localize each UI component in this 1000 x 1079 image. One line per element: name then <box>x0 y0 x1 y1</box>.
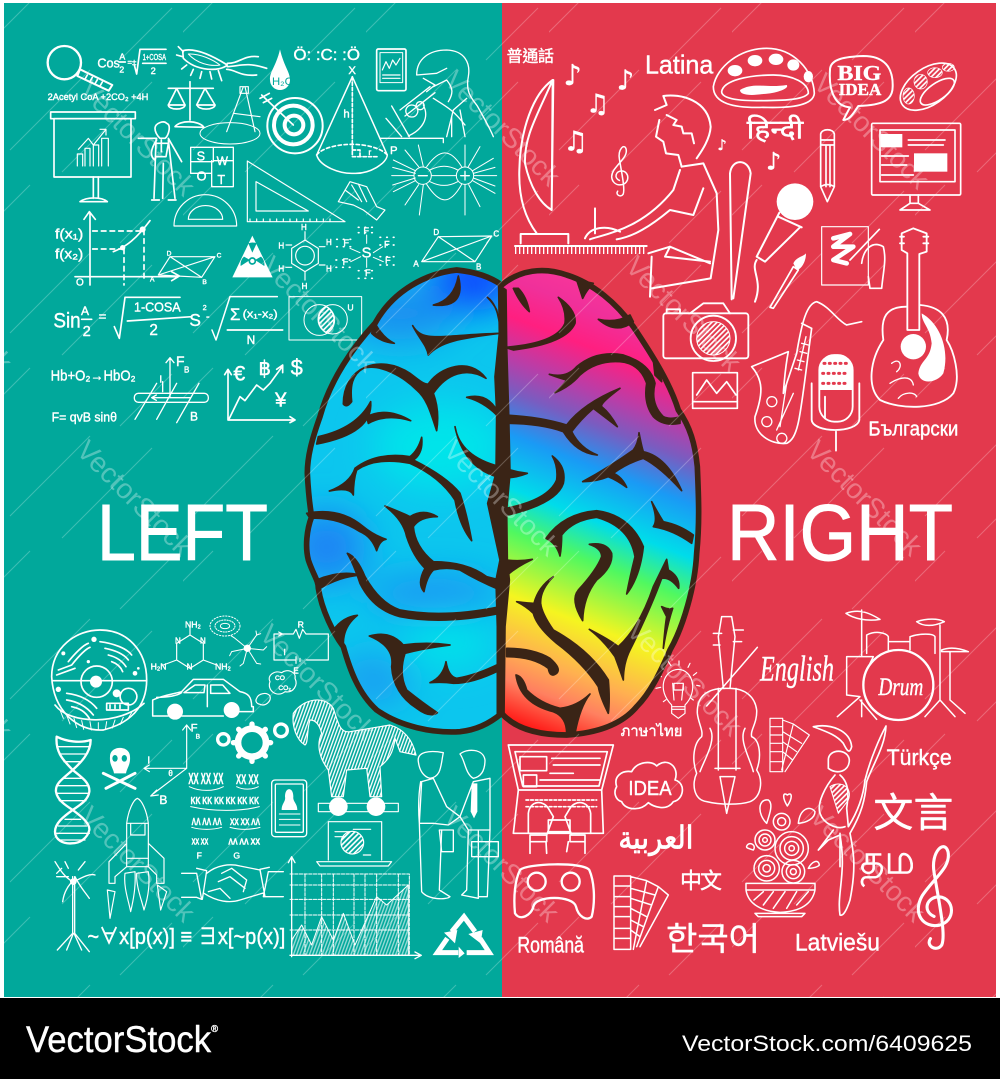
icon: pencil <box>821 130 834 202</box>
formula: half angle cosine: Cos <box>97 56 120 70</box>
diagram: sulfur hexafluoride: F <box>385 255 391 265</box>
text: Thai: ภาษาไทย <box>621 722 682 740</box>
icon: man presenting <box>138 122 182 200</box>
brain: right hemisphere colour <box>502 260 702 740</box>
text: Tamil: தம <box>860 835 915 887</box>
icon: laptop with pie chart <box>317 822 392 866</box>
icon: big idea speech bubble <box>830 56 893 120</box>
diagram: sulfur hexafluoride: F <box>363 226 369 236</box>
formula: sine half angle: 2 <box>83 324 91 340</box>
diagram: melamine molecule: N <box>200 636 206 645</box>
icon: gears <box>218 724 287 761</box>
brain: outline <box>307 270 699 735</box>
watermark: repeated diagonal stock text: VectorStock <box>620 250 748 379</box>
icon: CO2 cloud: CO <box>275 675 285 682</box>
icon: star neuron <box>230 631 267 666</box>
icon: laptop with hands typing <box>508 745 613 853</box>
icon: radiation triangle <box>232 236 273 277</box>
icon: neuron <box>55 862 95 952</box>
diagram: electric circuit: R <box>298 619 304 629</box>
watermark: repeated diagonal stock text: VectorStock <box>254 618 382 747</box>
formula: sine half angle <box>53 297 192 340</box>
text: Bulgarian: Български <box>868 417 958 440</box>
panel: right red background <box>502 3 996 997</box>
icon: animal cell <box>52 630 147 730</box>
diagram: melamine molecule: H₂N <box>151 661 167 671</box>
icons: music notes: ♫ <box>586 90 609 120</box>
icon: paintbrush <box>770 253 806 308</box>
brain: central fissure <box>488 285 510 717</box>
formula: standard deviation: 2 <box>203 303 207 312</box>
icon: SWOT puzzle <box>191 147 233 187</box>
diagram: parallelogram: B <box>202 279 207 286</box>
chart: currencies and growth: ¥ <box>274 389 287 412</box>
icon: CO2 cloud <box>256 671 296 705</box>
diagram: benzene <box>278 223 332 291</box>
icon: studio microphone <box>812 355 859 451</box>
diagram: current in magnetic field: B <box>190 410 198 424</box>
chart: currencies and growth: ฿ <box>258 358 271 380</box>
icon: handshake <box>182 865 283 902</box>
icon: target with arrow <box>260 93 323 153</box>
watermark: repeated diagonal stock text: VectorStock <box>808 67 936 196</box>
chart: function graph: O <box>76 278 84 289</box>
icon: skull and crossbones <box>103 748 135 788</box>
icon: picture frame <box>693 373 737 408</box>
text: Chinese: 中文 <box>680 863 722 895</box>
formula: acetyl CoA: 2Acetyl CoA +2CO₂ +4H <box>48 92 148 102</box>
diagram: parallelogram <box>150 251 222 286</box>
footer: VectorStock logo: VectorStock <box>26 1019 223 1060</box>
doodles: music, art and computers, upper right <box>507 43 965 451</box>
chart: function graph: f(x₂) <box>55 245 83 261</box>
icons: music notes <box>563 58 781 175</box>
text: Turkish: Türkçe <box>887 745 952 770</box>
icons: music notes: ♪ <box>766 147 781 175</box>
diagram: magnetic force axes: B <box>159 793 167 807</box>
formula: sine half angle: = <box>99 309 107 324</box>
formula: carbon dioxide Lewis: Ö: :C: :Ö <box>293 46 360 64</box>
icon: noodle bowl with steam <box>746 794 819 917</box>
diagram: chromosomes: ΛΛ ΛΛ ΛΛ <box>192 817 222 828</box>
formula: half angle cosine: 2 <box>151 66 156 76</box>
diagram: benzene: H <box>326 265 332 274</box>
icon: balance scale <box>168 82 215 127</box>
diagram: benzene: H <box>278 265 284 274</box>
icon: SWOT puzzle: O <box>197 170 207 184</box>
icon: cone: h <box>343 108 350 120</box>
diagram: melamine molecule: NH₂ <box>215 661 231 671</box>
text: Mandarin: 普通話 <box>507 43 554 67</box>
diagram: magnetic force axes: F <box>191 723 198 735</box>
diagram: current in magnetic field: B <box>184 366 189 375</box>
icon: big idea speech bubble: BIG <box>837 63 881 85</box>
watermark: repeated diagonal stock text: VectorStock <box>74 800 202 929</box>
doodles: biology and engineering, lower left <box>52 616 498 959</box>
diagram: melamine molecule: N <box>175 636 181 645</box>
watermark: repeated diagonal stock text: VectorStock <box>74 74 202 203</box>
formula: carbon dioxide Lewis <box>293 46 360 77</box>
diagram: chromosomes: F <box>197 850 202 860</box>
icon: large colour swatch <box>614 876 668 949</box>
icon: recycle symbol <box>437 917 489 958</box>
icon: acoustic guitar <box>872 228 957 407</box>
watermark: repeated diagonal stock text: VectorStock <box>256 250 384 379</box>
diagram: benzene: H <box>278 241 284 250</box>
watermark: repeated diagonal stock text: VectorStock <box>801 434 929 563</box>
formula: half angle cosine: =± <box>127 58 137 67</box>
icon: SWOT puzzle: T <box>217 173 225 187</box>
diagram: chromosomes: ΛΛ ΛΛ XX <box>228 836 260 846</box>
formula: sine half angle: Sin <box>53 308 81 332</box>
diagram: parallelogram ABCD right: A <box>413 260 419 269</box>
brain: left hemisphere colour <box>309 273 500 730</box>
watermark: repeated diagonal stock text: VectorStock <box>804 800 932 929</box>
diagram: sulfur hexafluoride: F <box>343 257 349 267</box>
icon: light bulb <box>656 661 700 718</box>
icon: protractor <box>174 195 237 226</box>
icon: two businessmen shaking hands <box>418 750 498 899</box>
panel: left teal background <box>4 3 502 997</box>
formula: magnetic force: F= qvB sinθ <box>52 411 117 425</box>
icons: music notes: ♪ <box>617 65 634 96</box>
diagram: venn box: U <box>347 303 354 313</box>
footer: black bar <box>0 998 1000 1079</box>
heading: LEFT: LEFT <box>97 488 268 577</box>
formula: haemoglobin: Hb+O₂→HbO₂ <box>51 369 136 385</box>
brain: folds of right hemisphere <box>505 280 693 733</box>
icon: bacterium <box>177 47 267 81</box>
heading: RIGHT: RIGHT <box>727 488 953 577</box>
diagram: parallelogram: A <box>150 277 155 284</box>
diagram: benzene: H <box>302 282 308 291</box>
diagram: current in magnetic field <box>134 353 208 424</box>
text: charge P: P <box>390 145 398 157</box>
brain: folds of left hemisphere <box>307 276 527 715</box>
diagram: electric circuit <box>274 619 328 675</box>
icon: large treble clef <box>918 847 951 948</box>
formula: logic negation: ~∀x[p(x)] ≡ ∃x[~p(x)] <box>87 924 285 949</box>
doodles: arts and languages, lower right <box>508 610 968 960</box>
icon: magnifying glass <box>48 46 112 91</box>
diagram: parallelogram: C <box>217 252 222 259</box>
watermark: repeated diagonal stock text: VectorStock <box>439 64 567 193</box>
diagram: chromosomes: KK KK KK KK KK KK <box>191 796 260 807</box>
icon: rocket <box>107 798 167 918</box>
watermark: repeated diagonal stock text: VectorStock <box>438 800 566 929</box>
diagram: sulfur hexafluoride: F <box>384 239 390 249</box>
diagram: melamine molecule <box>151 619 231 671</box>
icon: small treble clef <box>612 147 628 196</box>
chart: grid with zigzag <box>288 857 421 959</box>
diagram: benzene: H <box>301 223 307 232</box>
icon: virus blob <box>210 616 240 636</box>
formula: half angle cosine: A <box>119 51 125 61</box>
icon: smartphone profile <box>272 780 307 837</box>
formula: standard deviation: N <box>247 333 255 347</box>
icon: desktop computer <box>872 123 961 210</box>
diagram: venn box <box>289 297 362 340</box>
text: classical Chinese: 文言 <box>873 781 953 839</box>
icon: DNA helix <box>55 737 91 843</box>
icon: electric field lines <box>392 145 497 215</box>
diagram: chromosomes: XX XX ΛΛ <box>230 817 261 827</box>
diagram: magnetic force axes: B <box>196 733 201 740</box>
icon: big idea speech bubble: IDEA <box>839 80 881 99</box>
footer: image URL: VectorStock.com/6409625 <box>682 1031 972 1056</box>
chart: currencies and growth: $ <box>291 355 303 380</box>
icon: water drop H2O: H₂O <box>272 76 294 88</box>
icon: water drop H2O <box>270 49 294 90</box>
diagram: chromosomes: XX XX XX <box>188 771 224 788</box>
icon: trojan horse <box>293 700 416 816</box>
icon: office chair <box>730 162 751 299</box>
icon: game controller <box>514 864 594 919</box>
diagram: magnetic force axes: θ <box>168 769 173 778</box>
chart: currencies and growth: € <box>233 362 245 386</box>
formula: standard deviation: - <box>206 311 210 323</box>
icon: idea cloud: IDEA <box>628 778 672 800</box>
icon: SWOT puzzle: S <box>197 150 205 164</box>
diagram: electric circuit: I <box>283 647 286 657</box>
icon: drum kit <box>837 610 968 720</box>
diagram: melamine molecule: N <box>187 662 193 671</box>
text: Korean: 한국어 <box>666 913 760 960</box>
watermark: repeated diagonal stock text: VectorStock <box>438 434 566 563</box>
icons: music notes: ♫ <box>563 127 588 158</box>
icon: paint palette <box>713 48 814 107</box>
icon: studio monitor and desk <box>515 80 647 250</box>
formula: standard deviation: Σ <box>230 305 240 324</box>
icon: saxophone <box>752 302 862 443</box>
text: English: English <box>759 649 834 689</box>
formula: sine half angle: 2 <box>149 322 158 339</box>
diagram: parallelogram: D <box>167 251 172 258</box>
icon: cello and bow <box>694 617 761 813</box>
diagram: sulfur hexafluoride: F <box>365 268 371 278</box>
diagram: benzene: H <box>326 238 332 247</box>
icon: car <box>153 679 253 720</box>
icons: music notes: ♪ <box>563 58 582 92</box>
icon: whiteboard with bar chart <box>51 112 135 202</box>
brain: two coloured hemispheres <box>287 250 702 740</box>
diagram: chromosomes <box>188 771 261 860</box>
watermark: repeated diagonal stock text <box>0 64 936 929</box>
diagram: chromosomes: XX XX <box>236 771 259 787</box>
formula: half angle cosine: 1+COSA <box>143 52 166 62</box>
diagram: parallelogram ABCD right: B <box>476 262 481 271</box>
icon: tablet chart <box>377 49 406 91</box>
chart: function graph: f(x₁) <box>55 225 83 241</box>
formula: carbon dioxide Lewis: X <box>348 65 356 77</box>
icons: music notes: ♪ <box>717 137 727 154</box>
icon: handheld microphone <box>755 183 813 302</box>
icon: SWOT puzzle: W <box>217 154 229 168</box>
formula: half angle cosine: 2 <box>119 65 124 75</box>
diagram: chromosomes: G <box>233 850 240 860</box>
icon: scientist with microscope <box>380 50 493 143</box>
icon: ballerina <box>813 726 886 915</box>
chart: currencies and growth <box>225 355 303 423</box>
diagram: parallelogram ABCD right: D <box>433 228 439 237</box>
icon: man at desk <box>585 95 718 297</box>
formula: standard deviation <box>189 297 283 347</box>
watermark: repeated diagonal stock text: VectorStock <box>71 434 199 563</box>
text: Latina: Latina <box>645 49 714 79</box>
icon: drawing compass and ellipse <box>200 87 260 144</box>
icon: drum kit: Drum <box>878 673 923 701</box>
formula: standard deviation: (x₁-x₂) <box>243 308 278 320</box>
formula: half angle cosine <box>97 49 166 76</box>
diagram: sulfur hexafluoride: F <box>343 238 349 248</box>
diagram: magnetic force axes <box>144 723 201 807</box>
icon: cone <box>317 77 387 173</box>
icon: CO2 cloud: CO₂ <box>278 685 291 692</box>
icon: camera <box>663 303 748 361</box>
text: Hindi: हिन्दी <box>747 114 805 144</box>
diagram: electric circuit: E <box>293 666 299 675</box>
chart: function graph <box>55 212 179 289</box>
icon: hand holding cards <box>338 182 385 220</box>
icon: cone: r <box>368 147 371 157</box>
formula: sine half angle: A <box>81 304 89 318</box>
diagram: sulfur hexafluoride: S <box>362 245 372 261</box>
icon: hand painting on canvas <box>822 227 885 288</box>
footer: VectorStock logo: ® <box>211 1024 219 1035</box>
diagram: chromosomes: XX XX <box>192 836 208 846</box>
diagram: magnetic force axes: I <box>147 755 150 766</box>
icon: oval palette <box>892 53 965 120</box>
diagram: melamine molecule: NH₂ <box>185 619 201 629</box>
icon: small colour swatch <box>770 718 809 772</box>
doodles: science and math, upper left <box>48 46 499 425</box>
formula: sine half angle: 1-COSA <box>134 300 181 315</box>
formula: standard deviation: S <box>189 310 201 330</box>
icon: set square <box>247 161 345 222</box>
text: Arabic: العربية <box>618 820 693 856</box>
watermark: repeated diagonal stock text: VectorStock <box>621 614 749 743</box>
text: Romanian: Română <box>517 932 585 957</box>
diagram: parallelogram ABCD right <box>413 228 499 271</box>
diagram: sulfur hexafluoride <box>336 226 400 278</box>
diagram: parallelogram ABCD right: C <box>493 230 499 239</box>
text: Latvian: Latviešu <box>795 930 880 957</box>
icon: idea cloud <box>615 762 682 809</box>
diagram: current in magnetic field: F <box>176 353 185 369</box>
diagram: current in magnetic field: I <box>159 375 162 386</box>
